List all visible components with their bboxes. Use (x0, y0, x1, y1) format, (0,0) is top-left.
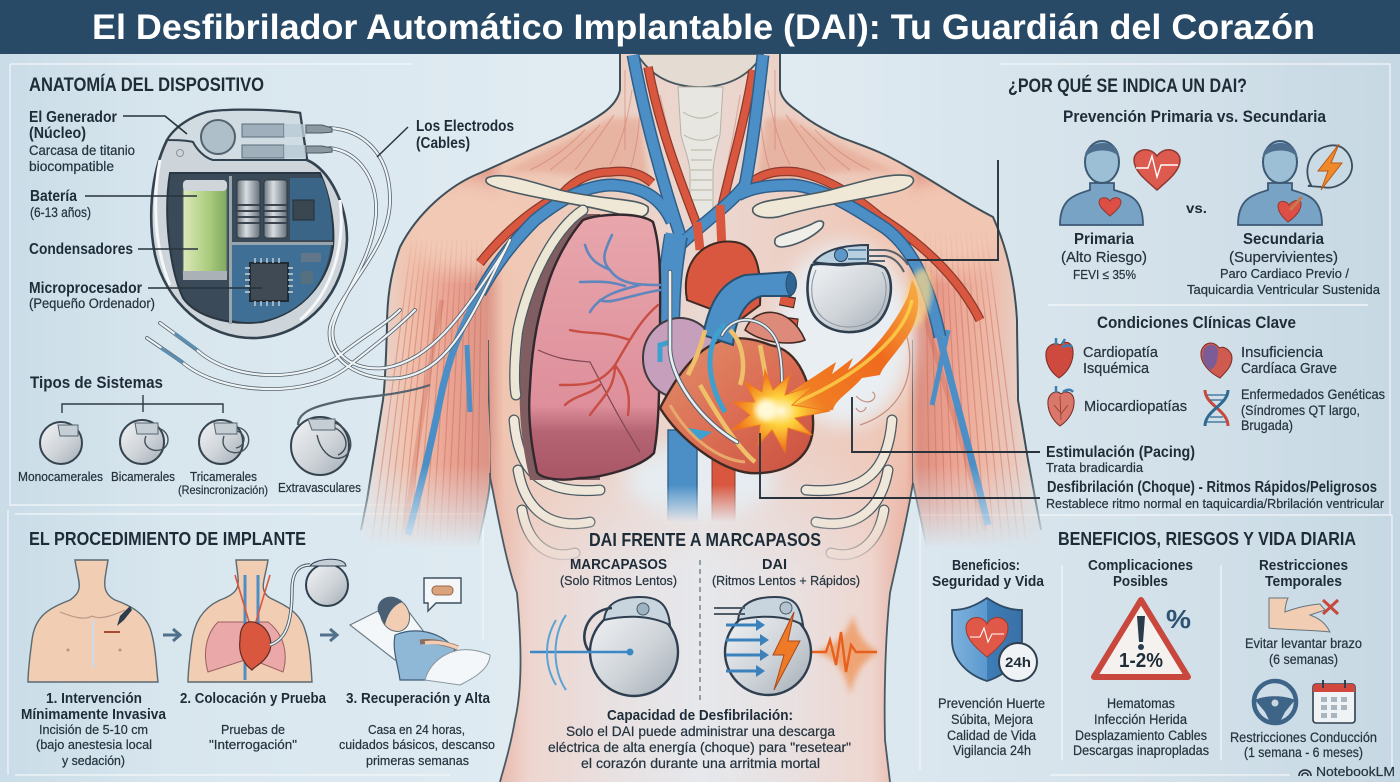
system type: bicamerales: Bicamerales (111, 469, 175, 484)
column: restricciones: (1 semana - 6 meses) (1244, 745, 1363, 760)
panel: DAI frente a marcapasos (530, 530, 878, 771)
column: DAI heading: (Ritmos Lentos + Rápidos) (712, 573, 860, 588)
text: secundaria (1187, 231, 1381, 297)
condition: cardiopatía isquémica: Isquémica (1083, 361, 1150, 377)
icon: pacemaker (530, 597, 678, 696)
connector lines (760, 160, 1040, 498)
heading: procedimiento: EL PROCEDIMIENTO DE IMPLANTE (29, 529, 306, 549)
column: beneficios (932, 558, 1045, 758)
step 3 text: cuidados básicos, descanso (339, 737, 495, 752)
illustration: incision on chest (28, 560, 158, 682)
column: marcapasos heading (560, 557, 677, 588)
label: microprocesador: (Pequeño Ordenador) (29, 296, 155, 311)
step 2 text: 2. Colocación y Prueba (180, 691, 327, 707)
heading: beneficios: BENEFICIOS, RIESGOS Y VIDA DIARIA (1058, 529, 1356, 549)
column: restricciones (1230, 558, 1377, 760)
icon: person secondary (1238, 141, 1322, 225)
callout: desfibrilación: Restablece ritmo normal en taquicardia/Rbrilación ventricular (1046, 496, 1385, 511)
illustration: device placement (188, 559, 348, 682)
label: el generador: Carcasa de titanio (29, 143, 135, 158)
text: secundaria: Secundaria (1243, 231, 1324, 248)
trachea (678, 87, 723, 220)
condition: insuficiencia cardíaca: Insuficiencia (1241, 345, 1324, 361)
text: primaria: FEVI ≤ 35% (1073, 267, 1136, 282)
column: restricciones: Temporales (1265, 574, 1342, 590)
step 2 text: "Interrogación" (209, 737, 297, 752)
icon: warning triangle (1094, 600, 1191, 677)
system type: extravasculares: Extravasculares (278, 480, 361, 495)
label: microprocesador (29, 280, 262, 311)
step 2 text (180, 691, 327, 752)
column: complicaciones (1073, 558, 1209, 758)
column: beneficios: Beneficios: (952, 558, 1020, 574)
panel: beneficios, riesgos y vida diaria (932, 529, 1377, 760)
icon: warning triangle: % (1166, 604, 1191, 634)
rib cartilage and pleura (515, 210, 600, 480)
neck and trapezius (505, 54, 895, 190)
system type: tricamerales: Tricamerales (190, 469, 257, 484)
label: el generador: (Núcleo) (29, 125, 86, 142)
title banner (0, 0, 1400, 54)
panel: anatomía del dispositivo (18, 74, 514, 497)
condition: insuficiencia cardíaca: Cardíaca Grave (1241, 361, 1337, 377)
condition: insuficiencia cardíaca (1201, 343, 1337, 378)
text: capacidad de desfibrilación: Solo el DAI puede administrar una descarga (566, 723, 835, 739)
step 3 text: Casa en 24 horas, (368, 722, 465, 737)
text: capacidad de desfibrilación: eléctrica de alta energía (choque) para "resetear" (548, 739, 851, 755)
condition: miocardiopatías (1048, 386, 1187, 426)
text: secundaria: Taquicardia Ventricular Sustenida (1187, 282, 1381, 297)
watermark: NotebookLM: NotebookLM (1316, 764, 1395, 779)
label: el generador: biocompatible (29, 159, 114, 174)
icon: calendar (1313, 680, 1355, 723)
column: marcapasos heading: MARCAPASOS (570, 557, 667, 573)
veins (480, 55, 940, 337)
column: beneficios: Seguridad y Vida (932, 574, 1045, 590)
label: los electrodos: Los Electrodos (416, 118, 514, 135)
condition: enfermedades genéticas: (Síndromes QT largo, (1241, 403, 1360, 418)
title banner: El Desfibrilador Automático Implantable (DAI): Tu Guardián del Corazón (92, 8, 1315, 47)
icon: lightning bubble (1307, 144, 1352, 190)
column: complicaciones: Descargas inapropladas (1073, 743, 1209, 758)
leads inside heart (670, 272, 782, 442)
icon: shield with heart and clock: 24h (1005, 654, 1031, 670)
ribs (514, 420, 892, 555)
step 1 text (21, 691, 167, 768)
heading: anatomía: ANATOMÍA DEL DISPOSITIVO (29, 74, 264, 96)
label: los electrodos (377, 118, 514, 157)
icon: steering wheel (1254, 681, 1296, 723)
column: DAI heading: DAI (762, 557, 787, 573)
system type: monocamerales: Monocamerales (18, 469, 103, 484)
column: complicaciones: Desplazamiento Cables (1075, 728, 1207, 743)
column: restricciones: Evitar levantar brazo (1245, 636, 1362, 651)
column: restricciones: (6 semanas) (1269, 652, 1338, 667)
arteries (480, 67, 980, 320)
system type: monocamerales (18, 422, 103, 484)
clavicles (486, 175, 914, 247)
step 2 text: Pruebas de (221, 722, 285, 737)
condition: miocardiopatías: Miocardiopatías (1084, 399, 1187, 415)
column: complicaciones: Posibles (1113, 574, 1168, 590)
text: primaria: Primaria (1074, 231, 1134, 248)
system type: tricamerales (178, 420, 268, 497)
condition: cardiopatía isquémica: Cardiopatía (1083, 345, 1159, 361)
label: microprocesador: Microprocesador (29, 280, 142, 297)
callout: desfibrilación (1046, 479, 1385, 511)
step 1 text: (bajo anestesia local (36, 737, 152, 752)
column: complicaciones: Hematomas (1107, 696, 1175, 711)
label: condensadores: Condensadores (29, 241, 133, 258)
label: el generador (29, 109, 187, 174)
step 1 text: Incisión de 5-10 cm (39, 722, 148, 737)
callout: estimulación (1046, 444, 1195, 475)
shoulders and arms (361, 54, 1042, 553)
column: beneficios: Súbita, Mejora (951, 712, 1033, 727)
icon: shield with heart and clock (952, 598, 1037, 681)
central anatomy illustration (361, 54, 1042, 782)
pectoral contour (856, 330, 910, 425)
heading: tipos de sistemas: Tipos de Sistemas (30, 373, 163, 392)
label: batería: Batería (30, 188, 77, 205)
text: primaria (1061, 231, 1147, 282)
illustration: patient recovering (350, 578, 490, 685)
condition: enfermedades genéticas: Brugada) (1241, 418, 1293, 433)
icon: ecg heart (1134, 150, 1180, 190)
condition: enfermedades genéticas: Enfermedados Genéticas (1241, 387, 1385, 402)
arrow step 2 (320, 629, 337, 641)
callout: estimulación: Trata bradicardia (1046, 460, 1144, 475)
implanted defibrillator (807, 245, 908, 332)
column: beneficios: Vigilancia 24h (953, 743, 1031, 758)
text: capacidad de desfibrilación: Capacidad de Desfibrilación: (607, 707, 793, 724)
condition: enfermedades genéticas (1205, 387, 1385, 433)
text: primaria: (Alto Riesgo) (1061, 249, 1147, 266)
column: beneficios: Prevención Huerte (938, 696, 1045, 711)
column: restricciones: Restricciones Conducción (1230, 730, 1377, 745)
step 1 text: 1. Intervención (46, 691, 142, 707)
system type: extravasculares (278, 385, 430, 495)
icon: arm with cross (1269, 598, 1338, 632)
condition: cardiopatía isquémica (1046, 338, 1159, 378)
label: los electrodos: (Cables) (416, 135, 470, 152)
column: beneficios: Calidad de Vida (947, 728, 1036, 743)
system types bracket (62, 395, 223, 413)
text: secundaria: (Supervivientes) (1229, 249, 1338, 266)
column: restricciones: Restricciones (1259, 558, 1348, 574)
icon: DAI with shock (714, 597, 878, 695)
vs label: vs. (1186, 201, 1207, 216)
heading: por qué: ¿POR QUÉ SE INDICA UN DAI? (1008, 75, 1247, 97)
text: capacidad de desfibrilación: el corazón durante una arritmia mortal (581, 755, 820, 771)
step 3 text: primeras semanas (366, 753, 469, 768)
column: complicaciones: Infección Herida (1094, 712, 1187, 727)
arrow step 1 (163, 629, 180, 641)
device cutaway (151, 110, 347, 338)
column: DAI heading (712, 557, 860, 588)
label: batería: (6-13 años) (30, 205, 91, 220)
system type: tricamerales: (Resincronización) (178, 483, 268, 497)
step 3 text: 3. Recuperación y Alta (346, 691, 491, 707)
heading: frente a marcapasos: DAI FRENTE A MARCAPASOS (589, 530, 821, 550)
text: secundaria: Paro Cardiaco Previo / (1220, 266, 1349, 281)
step 3 text (339, 691, 495, 768)
heart with aorta and pulmonary artery (643, 205, 813, 473)
label: el generador: El Generador (29, 109, 117, 126)
icon: warning triangle: 1-2% (1119, 650, 1163, 672)
step 1 text: y sedación) (62, 753, 125, 768)
step 1 text: Mínimamente Invasiva (21, 707, 167, 723)
device leads (147, 128, 510, 389)
subheading: prevención: Prevención Primaria vs. Secundaria (1063, 107, 1326, 126)
defibrillation shock bolt (732, 266, 937, 452)
torso (488, 280, 913, 782)
panel: por qué se indica (1008, 75, 1385, 511)
callout: estimulación: Estimulación (Pacing) (1046, 444, 1195, 461)
label: batería (30, 188, 197, 220)
icon: person primary (1060, 141, 1143, 225)
system type: bicamerales (111, 420, 175, 484)
lower aorta and vena cava (668, 430, 735, 525)
lung (529, 215, 660, 480)
column: marcapasos heading: (Solo Ritmos Lentos) (560, 573, 677, 588)
subheading: condiciones: Condiciones Clínicas Clave (1097, 314, 1296, 332)
panel: procedimiento de implante (21, 529, 495, 768)
column: complicaciones: Complicaciones (1088, 558, 1193, 574)
text: capacidad de desfibrilación (548, 707, 851, 771)
